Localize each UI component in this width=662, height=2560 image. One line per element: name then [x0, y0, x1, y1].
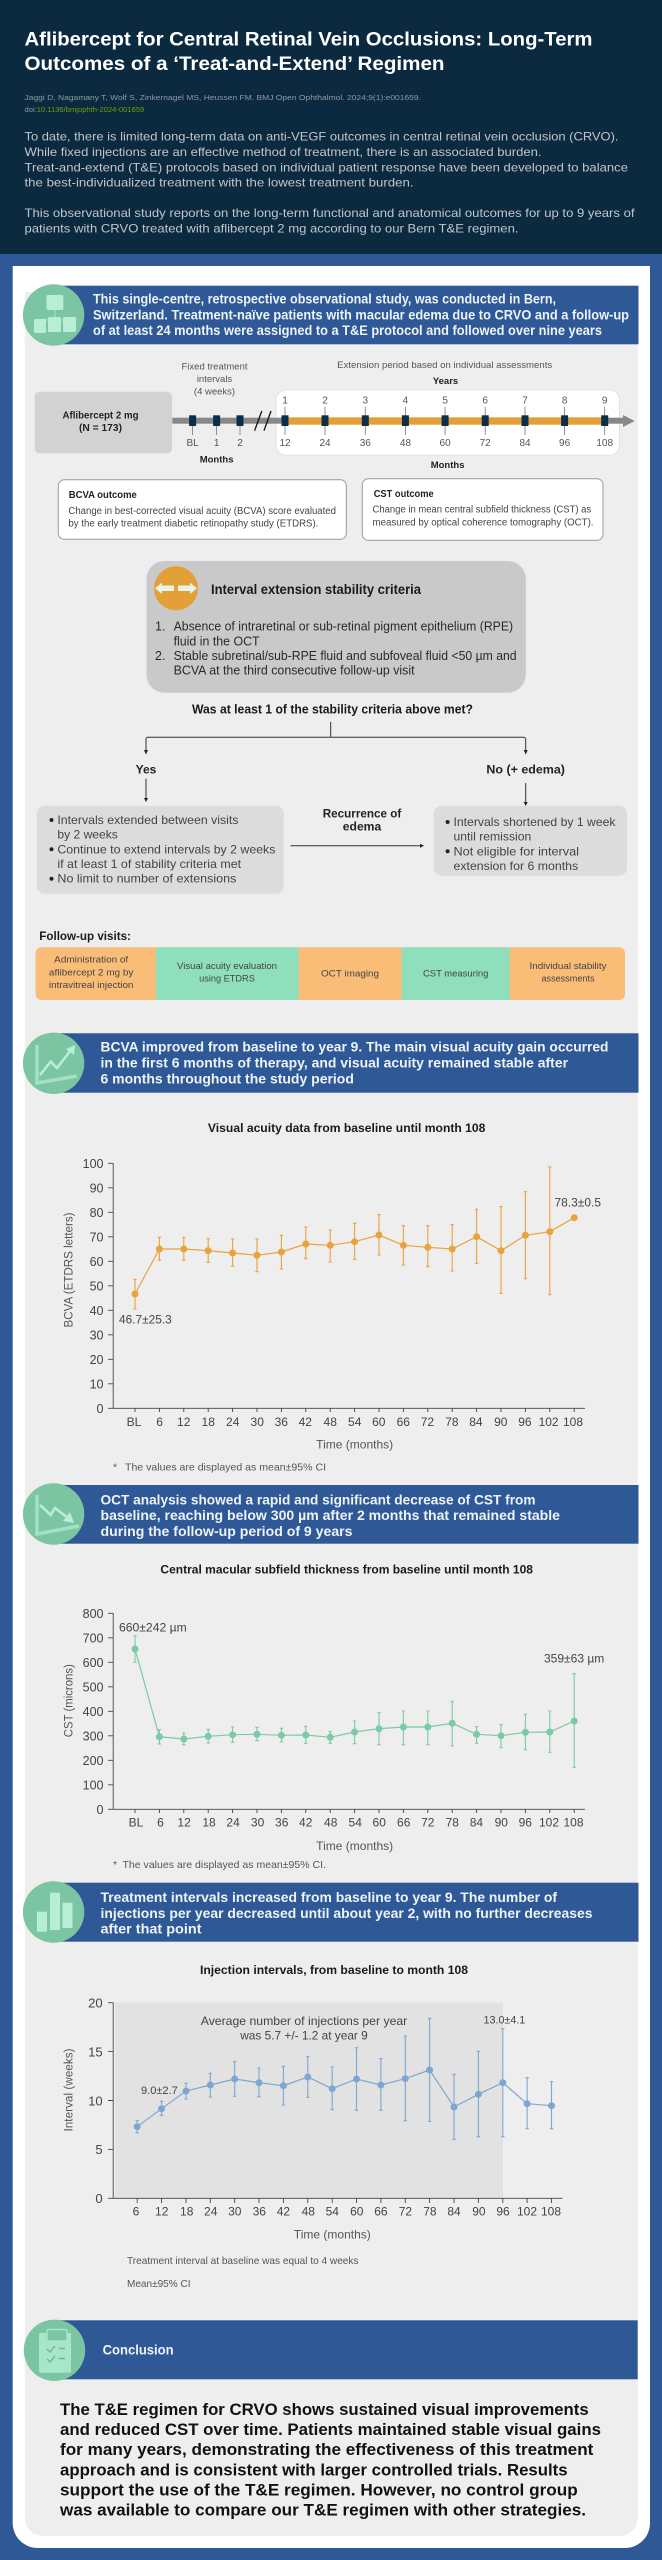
banner text: BCVA improved from baseline to year 9. The main visual acuity gain occurred [100, 1040, 608, 1055]
y axis labels [88, 1996, 103, 2206]
axes [108, 1163, 585, 1412]
recurrence label: Recurrence of [323, 809, 401, 821]
x axis labels: 66 [397, 1415, 410, 1429]
x axis labels: 6 [156, 1415, 163, 1429]
yes outcome box: Intervals extended between visits [57, 813, 238, 827]
x axis labels: 66 [397, 1816, 411, 1830]
y axis labels: 800 [83, 1607, 104, 1621]
month numbers: 2 [237, 438, 243, 449]
follow-up heading: Follow-up visits: [39, 929, 131, 943]
banner: OCT [23, 1483, 638, 1545]
CST outcome box: CST outcome [374, 489, 434, 500]
extension period label: Extension period based on individual assessments [337, 360, 552, 371]
footnotes: Mean±95% CI [127, 2278, 190, 2290]
y axis labels: 20 [90, 1353, 104, 1367]
BCVA outcome box: by the early treatment diabetic retinopathy study (ETDRS). [68, 519, 318, 530]
no outcome box: Not eligible for interval [454, 844, 579, 858]
yes outcome box: if at least 1 of stability criteria met [57, 857, 242, 871]
y axis labels: 80 [90, 1206, 104, 1220]
y axis labels: 500 [83, 1680, 104, 1694]
banner text [93, 291, 629, 338]
data line [135, 1218, 574, 1294]
banner text [100, 1890, 592, 1937]
x axis labels: 72 [421, 1816, 435, 1830]
y axis labels: 300 [83, 1730, 104, 1744]
icon: clipboard [24, 2320, 85, 2381]
x axis labels: 102 [517, 2205, 537, 2219]
value labels: 78.3±0.5 [554, 1198, 601, 1210]
year numbers: 2 [322, 395, 328, 406]
criteria list [155, 620, 517, 678]
month numbers: 60 [440, 438, 451, 449]
y axis title: Interval (weeks) [64, 2048, 76, 2132]
x axis labels: 24 [204, 2205, 218, 2219]
year numbers: 5 [442, 395, 448, 406]
x axis labels: 42 [299, 1415, 312, 1429]
criteria list: 1. [155, 620, 165, 634]
BCVA outcome box: BCVA outcome [69, 490, 137, 501]
fixed interval label: intervals [197, 374, 232, 385]
criteria list: Absence of intraretinal or sub-retinal pigment epithelium (RPE) [174, 620, 513, 634]
banner text: of at least 24 months were assigned to a T&E protocol and followed over nine years [93, 323, 602, 338]
fixed interval label: (4 weeks) [194, 387, 235, 398]
yes label: Yes [136, 762, 157, 776]
banner text: after that point [100, 1922, 202, 1937]
x axis labels: 12 [177, 1816, 191, 1830]
criteria list: BCVA at the third consecutive follow-up visit [174, 664, 415, 678]
data line [135, 1649, 574, 1739]
banner: conclusion [24, 2320, 638, 2381]
value labels [119, 1198, 601, 1326]
year numbers [282, 395, 608, 406]
follow-up strip: intravitreal injection [49, 980, 133, 991]
y axis labels: 10 [90, 1378, 104, 1392]
year numbers: 1 [282, 395, 288, 406]
x axis labels: 72 [399, 2205, 412, 2219]
introduction text [24, 130, 635, 235]
chart title: Central macular subfield thickness from baseline until month 108 [160, 1565, 534, 1577]
month numbers: 24 [319, 438, 331, 449]
y axis labels: 700 [83, 1632, 104, 1646]
y axis labels: 60 [90, 1255, 104, 1269]
y axis labels: 400 [83, 1705, 104, 1719]
banner text: Switzerland. Treatment-naïve patients with macular edema due to CRVO and a follow-up [93, 307, 629, 322]
banner: BCVA [23, 1033, 638, 1094]
x axis labels: 66 [374, 2205, 388, 2219]
month numbers [186, 438, 613, 449]
follow-up strip: OCT imaging [321, 969, 379, 980]
x axis title: Time (months) [316, 1839, 393, 1853]
treatment timeline [35, 360, 635, 471]
no outcome box: extension for 6 months [454, 859, 578, 873]
citation: doi:10.1136/bmjophth-2024-001659 [24, 105, 144, 114]
banner text: baseline, reaching below 300 µm after 2 months that remained stable [100, 1508, 561, 1523]
x axis labels: 108 [564, 1816, 584, 1830]
x axis labels [129, 1816, 584, 1830]
x axis labels: 54 [348, 1415, 362, 1429]
follow-up strip: assessments [542, 974, 595, 985]
y axis labels: 0 [95, 2191, 103, 2206]
y axis labels: 50 [90, 1280, 104, 1294]
x axis labels: 18 [180, 2205, 194, 2219]
year numbers: 9 [602, 395, 608, 406]
data points [132, 1214, 578, 1298]
x axis labels: BL [127, 1415, 142, 1429]
banner text: during the follow-up period of 9 years [100, 1524, 352, 1539]
CST outcome box [362, 479, 603, 540]
footnotes: Treatment interval at baseline was equal to 4 weeks [127, 2255, 358, 2267]
data line [137, 2070, 551, 2127]
conclusion text [59, 2401, 601, 2519]
annotation: Average number of injections per year [201, 2014, 407, 2028]
citation: Jaggi D, Nagamany T, Wolf S, Zinkernagel MS, Heussen FM. BMJ Open Ophthalmol. 2024;9(1):e001659. [24, 93, 421, 102]
banner text: in the first 6 months of therapy, and visual acuity remained stable after [100, 1055, 569, 1070]
y axis labels: 10 [88, 2093, 103, 2108]
x axis title: Time (months) [316, 1437, 393, 1451]
chart title: Injection intervals, from baseline to month 108 [200, 1965, 469, 1977]
no outcome box: Intervals shortened by 1 week [454, 815, 617, 829]
y axis labels: 0 [97, 1803, 104, 1817]
year numbers: 7 [522, 395, 528, 406]
icon: bar chart [23, 1881, 84, 1943]
conclusion text: for many years, demonstrating the effectiveness of this treatment [60, 2441, 594, 2459]
banner text [100, 1492, 561, 1539]
BCVA outcome box: Change in best-corrected visual acuity (BCVA) score evaluated [68, 506, 336, 517]
criteria list: 2. [155, 649, 165, 663]
y axis labels [83, 1607, 104, 1817]
x axis labels: 12 [177, 1415, 191, 1429]
conclusion text: The T&E regimen for CRVO shows sustained visual improvements [60, 2401, 589, 2419]
drug box [35, 392, 172, 453]
follow-up strip: aflibercept 2 mg by [49, 967, 134, 978]
criteria heading: Interval extension stability criteria [211, 582, 421, 597]
BCVA outcome box [58, 480, 346, 539]
banner text: injections per year decreased until about year 2, with no further decreases [100, 1906, 592, 1921]
x axis labels: 48 [324, 1415, 337, 1429]
value labels [141, 2014, 525, 2097]
x axis labels: 72 [421, 1415, 434, 1429]
criteria list: Stable subretinal/sub-RPE fluid and subfoveal fluid <50 µm and [174, 649, 517, 663]
y axis labels: 15 [88, 2044, 103, 2059]
annotation [201, 2014, 407, 2043]
introduction text: This observational study reports on the long-term functional and anatomical outcomes for up to 9 years of [24, 206, 635, 220]
months labels [200, 455, 464, 471]
value labels: 13.0±4.1 [484, 2014, 525, 2026]
month numbers: 96 [559, 438, 571, 449]
CST outcome box: measured by optical coherence tomography (OCT). [372, 517, 594, 528]
banner text: This single-centre, retrospective observational study, was conducted in Bern, [93, 291, 556, 306]
drug box: Aflibercept 2 mg [62, 411, 139, 422]
stability criteria panel [146, 561, 526, 693]
month numbers: 72 [480, 438, 491, 449]
year box [276, 390, 620, 455]
y axis labels: 200 [83, 1754, 104, 1768]
data points [132, 1646, 578, 1742]
value labels: 359±63 µm [544, 1654, 604, 1666]
months labels: Months [431, 460, 464, 471]
y axis labels: 40 [90, 1304, 104, 1318]
CST outcome box: Change in mean central subfield thickness (CST) as [372, 505, 591, 516]
banner text: 6 months throughout the study period [100, 1071, 354, 1086]
conclusion text: approach and is consistent with larger controlled trials. Results [60, 2461, 568, 2479]
x axis labels: 96 [496, 2205, 510, 2219]
yes outcome box: Continue to extend intervals by 2 weeks [57, 842, 275, 856]
y axis labels: 600 [83, 1656, 104, 1670]
citation [24, 93, 421, 114]
banner text: Treatment intervals increased from baseline to year 9. The number of [100, 1890, 558, 1905]
follow-up strip: Individual stability [530, 961, 607, 972]
x axis labels: 24 [226, 1816, 240, 1830]
x axis labels: 42 [299, 1816, 313, 1830]
yes outcome box: by 2 weeks [57, 828, 118, 842]
x axis labels: 90 [495, 1816, 508, 1830]
banner heading: Conclusion [103, 2342, 174, 2357]
value labels: 46.7±25.3 [119, 1314, 172, 1326]
x axis labels: 90 [472, 2205, 486, 2219]
month numbers: 36 [360, 438, 371, 449]
x axis labels [133, 2205, 561, 2219]
month numbers: 1 [214, 438, 220, 449]
introduction text: To date, there is limited long-term data on anti-VEGF outcomes in central retinal vein occlusion (CRVO). [24, 130, 618, 144]
x axis labels: 108 [563, 1415, 583, 1429]
x axis labels: 36 [275, 1816, 289, 1830]
y axis title: BCVA (ETDRS letters) [64, 1212, 76, 1328]
drug box: (N = 173) [79, 423, 122, 434]
month numbers: 84 [519, 438, 531, 449]
month numbers: BL [186, 438, 199, 449]
footnote: The values are displayed as mean±95% CI [125, 1462, 326, 1474]
y axis labels: 70 [90, 1230, 104, 1244]
timeline bar with arrow [172, 411, 635, 431]
y axis labels: 90 [90, 1182, 104, 1196]
recurrence label: edema [343, 822, 382, 834]
chart title: Visual acuity data from baseline until month 108 [208, 1123, 486, 1135]
conclusion text: support the use of the T&E regimen. However, no control group [60, 2481, 578, 2499]
extension period label: Years [433, 376, 458, 387]
annotation: was 5.7 +/- 1.2 at year 9 [239, 2029, 368, 2043]
x axis labels: 78 [423, 2205, 437, 2219]
follow-up strip: Visual acuity evaluation [177, 961, 277, 972]
decision tree arrows [144, 722, 528, 848]
y axis labels: 0 [97, 1402, 104, 1416]
error bars [136, 2018, 553, 2139]
follow-up strip [36, 947, 625, 1000]
x axis labels: 42 [277, 2205, 290, 2219]
fixed interval label: Fixed treatment [182, 361, 248, 372]
x axis labels: 108 [541, 2205, 561, 2219]
x axis labels: 6 [133, 2205, 140, 2219]
x axis labels: 60 [372, 1415, 386, 1429]
conclusion text: was available to compare our T&E regimen with other strategies. [59, 2501, 586, 2519]
x axis labels [127, 1415, 583, 1429]
extension period label [337, 360, 552, 387]
x axis labels: 96 [518, 1415, 532, 1429]
y axis labels: 100 [83, 1778, 104, 1792]
header panel [0, 0, 662, 254]
x axis labels: 84 [470, 1816, 483, 1830]
month numbers: 12 [279, 438, 291, 449]
banner: study design [23, 284, 638, 346]
y axis labels [83, 1157, 104, 1416]
x axis labels: 90 [494, 1415, 508, 1429]
y axis labels: 5 [95, 2142, 103, 2157]
yes outcome box [37, 806, 284, 894]
value labels [119, 1622, 604, 1666]
introduction text: patients with CRVO treated with aflibercept 2 mg according to our Bern T&E regimen. [24, 221, 518, 235]
x axis labels: 102 [539, 1816, 559, 1830]
x axis labels: 30 [251, 1816, 265, 1830]
icon: falling line chart [23, 1483, 84, 1545]
x axis labels: 6 [157, 1816, 164, 1830]
icon: rising line chart [23, 1033, 84, 1094]
timeline ticks [193, 407, 605, 435]
icon: connected boxes [23, 284, 84, 346]
y axis labels: 100 [83, 1157, 104, 1171]
follow-up strip: Administration of [54, 955, 129, 966]
x axis labels: 84 [447, 2205, 461, 2219]
value labels: 9.0±2.7 [141, 2085, 178, 2097]
x axis labels: 54 [349, 1816, 362, 1830]
x axis labels: 36 [253, 2205, 266, 2219]
no label: No (+ edema) [486, 762, 565, 776]
year numbers: 8 [562, 395, 568, 406]
x axis labels: 60 [350, 2205, 364, 2219]
title [24, 29, 592, 75]
months labels: Months [200, 455, 233, 466]
chart: central subfield thickness [64, 1565, 604, 1871]
x axis labels: 18 [202, 1415, 215, 1429]
x axis labels: 84 [469, 1415, 483, 1429]
x axis labels: 30 [251, 1415, 264, 1429]
x axis labels: 48 [302, 2205, 315, 2219]
x axis labels: 96 [519, 1816, 532, 1830]
recurrence label [323, 809, 401, 834]
x axis labels: 54 [326, 2205, 339, 2219]
x axis labels: 24 [226, 1415, 240, 1429]
title: Outcomes of a ‘Treat-and-Extend’ Regimen [24, 53, 444, 75]
title: Aflibercept for Central Retinal Vein Occlusions: Long-Term [24, 29, 592, 51]
y axis labels: 20 [88, 1996, 103, 2010]
axes [108, 2003, 562, 2203]
conclusion text: and reduced CST over time. Patients maintained stable visual gains [60, 2421, 601, 2439]
x axis labels: 78 [446, 1816, 459, 1830]
timeline markers [189, 415, 608, 426]
footnote: * [113, 1462, 117, 1474]
banner text [100, 1040, 608, 1086]
introduction text: the best-individualized treatment with the lowest treatment burden. [24, 176, 413, 190]
data points [134, 2066, 555, 2130]
x axis labels: 78 [445, 1415, 459, 1429]
error bars [133, 1167, 552, 1309]
x axis labels: 48 [324, 1816, 338, 1830]
footnote: * [113, 1859, 117, 1871]
chart: visual acuity [64, 1123, 601, 1474]
no outcome box [434, 806, 627, 876]
footnote: The values are displayed as mean±95% CI. [122, 1859, 326, 1871]
introduction text: While fixed injections are an effective method of treatment, there is an associated burden. [24, 145, 542, 159]
y axis title: CST (microns) [64, 1664, 76, 1737]
follow-up strip: CST measuring [423, 969, 488, 980]
x axis labels: 18 [202, 1816, 216, 1830]
footnotes [127, 2255, 358, 2290]
no outcome box: until remission [454, 830, 531, 844]
x axis labels: 30 [228, 2205, 242, 2219]
value labels: 660±242 µm [119, 1622, 187, 1634]
decision question: Was at least 1 of the stability criteria above met? [192, 703, 473, 717]
x axis labels: BL [129, 1816, 144, 1830]
month numbers: 108 [596, 438, 613, 449]
month numbers: 48 [400, 438, 411, 449]
year numbers: 4 [403, 395, 409, 406]
x axis labels: 60 [373, 1816, 386, 1830]
banner: treatment intervals [23, 1881, 638, 1943]
axes [108, 1613, 585, 1813]
banner text: OCT analysis showed a rapid and significant decrease of CST from [100, 1492, 536, 1507]
icon: interval arrows [154, 566, 198, 610]
x axis labels: 36 [275, 1415, 288, 1429]
shaded period [115, 2003, 503, 2198]
yes outcome box: No limit to number of extensions [57, 872, 236, 886]
x axis labels: 102 [539, 1415, 559, 1429]
introduction text: Treat-and-extend (T&E) protocols based on individual patient response have been developed to balance [24, 160, 628, 174]
year numbers: 3 [363, 395, 369, 406]
follow-up strip: using ETDRS [199, 974, 255, 985]
chart: injection intervals [64, 1965, 562, 2290]
fixed interval label [182, 361, 248, 398]
x axis labels: 12 [155, 2205, 169, 2219]
x axis title: Time (months) [294, 2228, 371, 2242]
error bars [133, 1636, 576, 1767]
y axis labels: 30 [90, 1328, 104, 1342]
year numbers: 6 [482, 395, 488, 406]
criteria list: fluid in the OCT [174, 634, 260, 648]
